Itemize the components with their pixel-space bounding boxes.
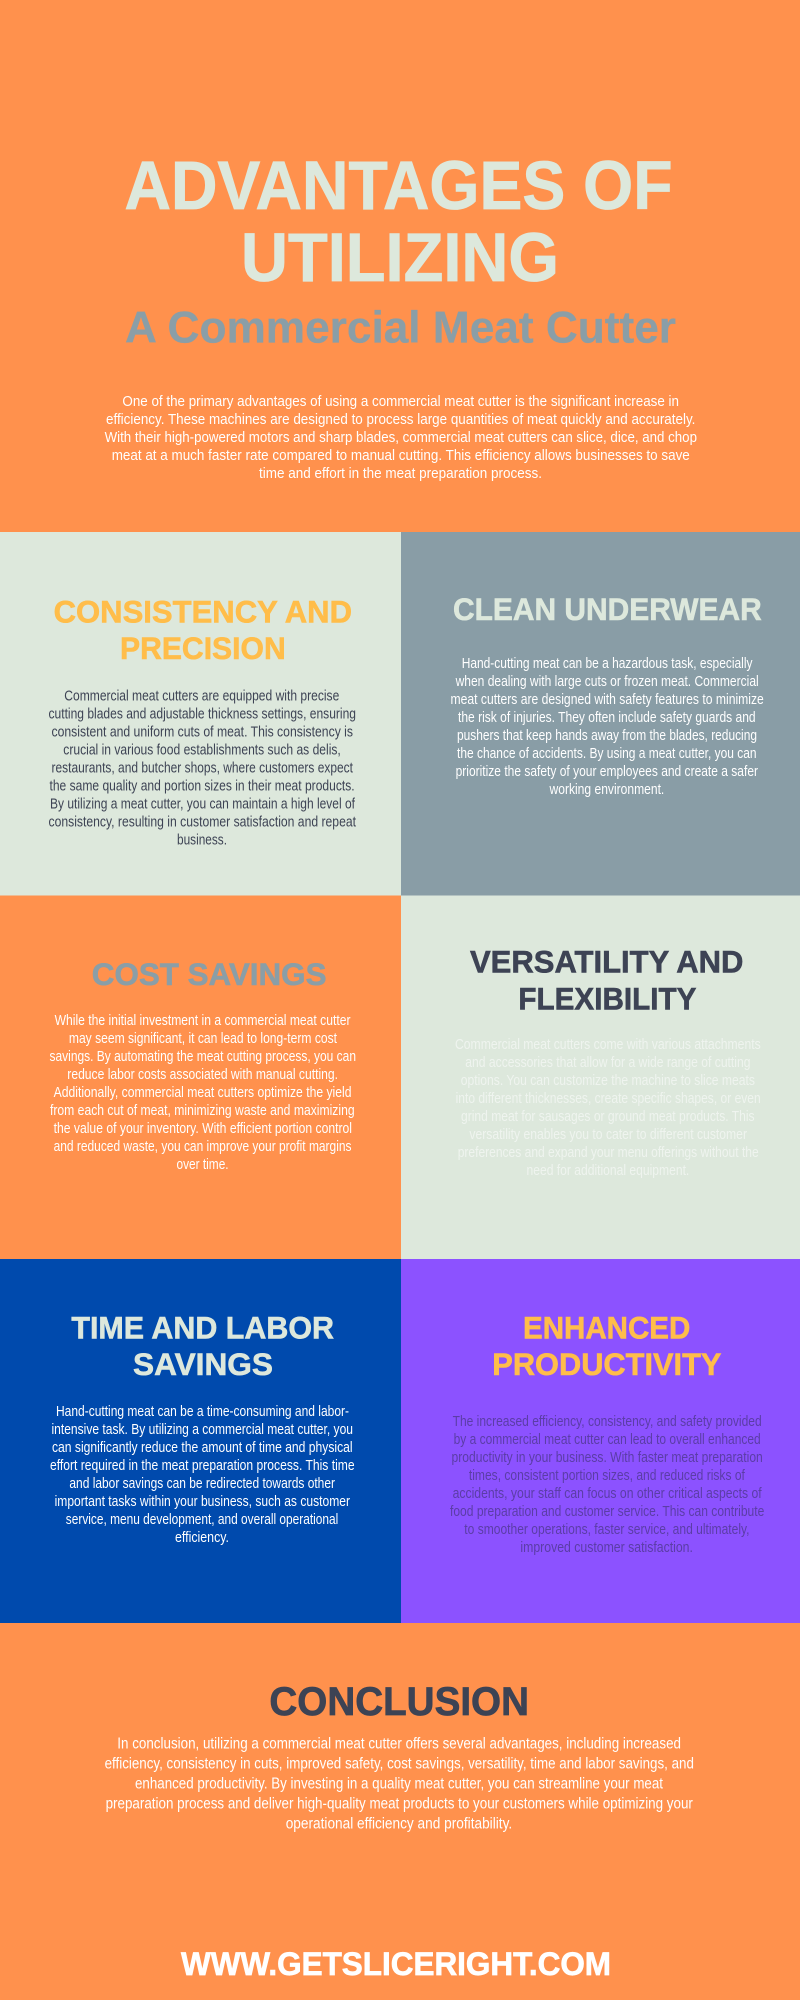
body text: efficiency.: [175, 1530, 229, 1546]
heading: [470, 944, 743, 1016]
panel: time and labor savings: [0, 1259, 401, 1623]
heading: CONSISTENCY AND: [54, 594, 352, 630]
body text: reduce labor costs associated with manual cutting.: [67, 1067, 338, 1083]
body text: the value of your inventory. With efficient portion control: [54, 1121, 352, 1137]
heading: [492, 1309, 721, 1382]
body text: and reduced waste, you can improve your profit margins: [54, 1139, 351, 1155]
body text: times, consistent portion sizes, and reduced risks of: [469, 1468, 746, 1484]
intro text: meat at a much faster rate compared to manual cutting. This efficiency allows businesses to save: [112, 447, 690, 464]
body text: [450, 656, 764, 798]
heading: PRODUCTIVITY: [492, 1346, 721, 1382]
heading: CONCLUSION: [269, 1680, 529, 1724]
body text: working environment.: [549, 782, 664, 798]
body text: consistent and uniform cuts of meat. This consistency is: [52, 724, 353, 740]
body text: versatility enables you to cater to different customer: [469, 1127, 747, 1143]
body text: can significantly reduce the amount of time and physical: [52, 1440, 353, 1456]
intro text: efficiency. These machines are designed to process large quantities of meat quickly and accurately.: [106, 411, 695, 428]
body text: effort required in the meat preparation process. This time: [50, 1458, 355, 1474]
body text: [455, 1037, 761, 1179]
body text: the same quality and portion sizes in their meat products.: [50, 778, 355, 794]
body text: service, menu development, and overall operational: [66, 1512, 338, 1528]
body text: [50, 1013, 356, 1173]
panel: clean underwear: [401, 532, 800, 896]
heading: PRECISION: [120, 630, 286, 666]
panel: header: [105, 147, 697, 482]
panel: cost savings: [0, 896, 401, 1259]
subtitle: A Commercial Meat Cutter: [125, 304, 676, 353]
body text: from each cut of meat, minimizing waste and maximizing: [50, 1103, 355, 1119]
body text: [105, 1735, 694, 1832]
body text: preparation process and deliver high-quality meat products to your customers while optimizing your: [106, 1795, 693, 1812]
heading: ENHANCED: [523, 1309, 690, 1345]
intro text: With their high-powered motors and sharp blades, commercial meat cutters can slice, dice, and chop: [105, 429, 697, 446]
body text: and accessories that allow for a wide range of cutting: [465, 1055, 750, 1071]
body text: to smoother operations, faster service, and ultimately,: [464, 1522, 750, 1538]
heading: SAVINGS: [133, 1346, 273, 1382]
body text: [50, 1404, 355, 1546]
title: ADVANTAGES OF: [124, 147, 672, 224]
body text: need for additional equipment.: [526, 1163, 689, 1179]
heading: [71, 1309, 334, 1382]
heading: TIME AND LABOR: [71, 1309, 334, 1345]
panel: conclusion: [105, 1680, 694, 1832]
body text: over time.: [176, 1157, 229, 1173]
panel: consistency and precision: [0, 532, 401, 896]
body text: restaurants, and butcher shops, where customers expect: [52, 760, 353, 776]
body text: business.: [177, 832, 227, 848]
website url: WWW.GETSLICERIGHT.COM: [181, 1946, 611, 1982]
title: UTILIZING: [241, 219, 559, 296]
heading: [54, 594, 352, 666]
body text: By utilizing a meat cutter, you can maintain a high level of: [50, 796, 356, 812]
body text: Commercial meat cutters are equipped with precise: [64, 688, 339, 704]
title: [124, 147, 672, 296]
body text: [48, 688, 356, 848]
intro text: One of the primary advantages of using a commercial meat cutter is the significant increase in: [122, 393, 679, 410]
body text: In conclusion, utilizing a commercial meat cutter offers several advantages, including increased: [117, 1735, 681, 1752]
body text: and labor savings can be redirected towards other: [69, 1476, 335, 1492]
intro text: [105, 393, 697, 482]
body text: operational efficiency and profitability.: [286, 1815, 512, 1832]
heading: VERSATILITY AND: [470, 944, 743, 980]
body text: efficiency, consistency in cuts, improved safety, cost savings, versatility, time and labor savings, and: [105, 1755, 694, 1772]
body text: While the initial investment in a commercial meat cutter: [55, 1013, 351, 1029]
body text: intensive task. By utilizing a commercial meat cutter, you: [52, 1422, 353, 1438]
body text: consistency, resulting in customer satisfaction and repeat: [48, 814, 356, 830]
body text: improved customer satisfaction.: [520, 1540, 693, 1556]
panel: versatility and flexibility: [401, 896, 800, 1259]
body text: [450, 1414, 764, 1556]
heading: FLEXIBILITY: [518, 980, 696, 1016]
body text: enhanced productivity. By investing in a quality meat cutter, you can streamline your meat: [135, 1775, 664, 1792]
panel: enhanced productivity: [401, 1259, 800, 1623]
body text: may seem significant, it can lead to long-term cost: [69, 1031, 337, 1047]
body text: Hand-cutting meat can be a time-consuming and labor-: [56, 1404, 349, 1420]
heading: COST SAVINGS: [92, 956, 326, 992]
heading: CLEAN UNDERWEAR: [453, 591, 762, 627]
body text: savings. By automating the meat cutting process, you can: [50, 1049, 356, 1065]
body text: Additionally, commercial meat cutters optimize the yield: [54, 1085, 351, 1101]
body text: crucial in various food establishments such as delis,: [63, 742, 341, 758]
body text: cutting blades and adjustable thickness settings, ensuring: [48, 706, 356, 722]
body text: important tasks within your business, such as customer: [55, 1494, 350, 1510]
intro text: time and effort in the meat preparation process.: [259, 465, 542, 482]
